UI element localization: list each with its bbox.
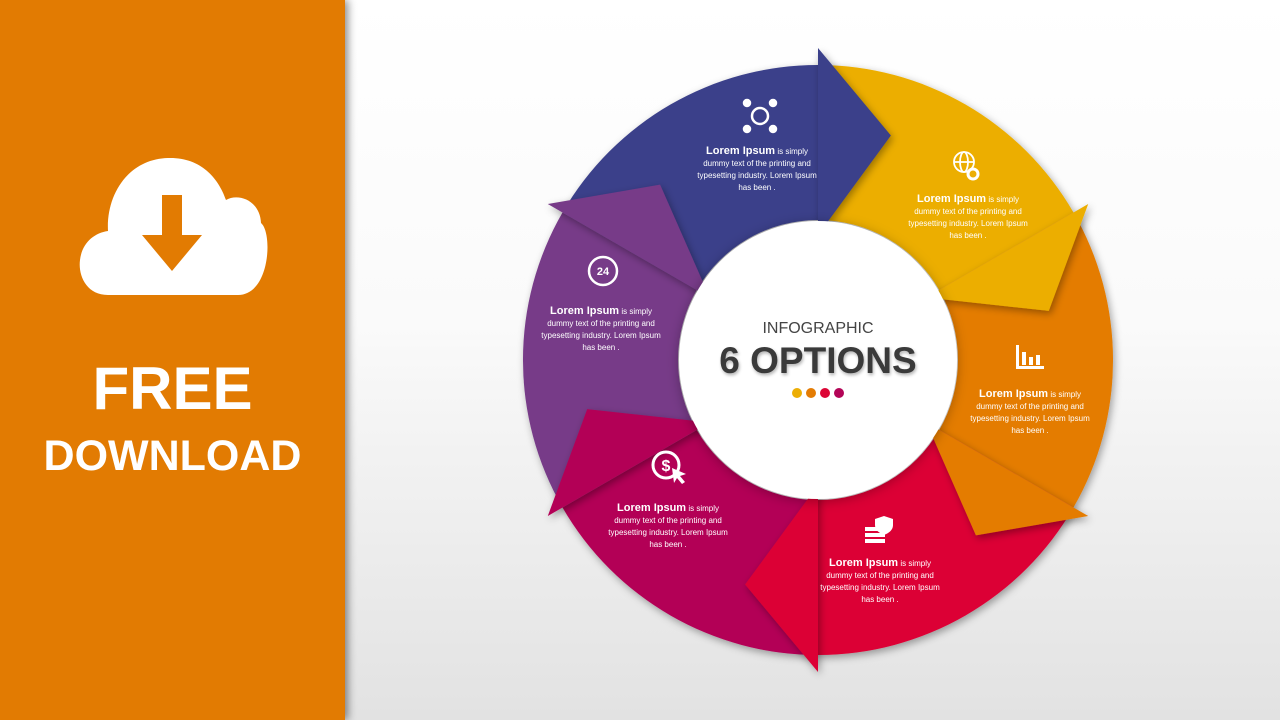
center dots — [792, 388, 844, 398]
icon: cloud download — [80, 158, 268, 295]
icon: globe gear — [954, 152, 978, 179]
icon: dollar click — [653, 452, 686, 484]
heading: DOWNLOAD: DOWNLOAD — [44, 432, 301, 480]
center title: 6 OPTIONS: 6 OPTIONS — [719, 340, 917, 381]
text: magenta option: Lorem Ipsum is simply dummy text of the printing and typesetting industry. Lorem Ipsum has been . — [608, 502, 728, 549]
panel: left orange banner — [0, 0, 345, 720]
text: blue option: Lorem Ipsum is simply dummy text of the printing and typesetting industry. Lorem Ipsum has been . — [697, 145, 817, 192]
text: yellow option: Lorem Ipsum is simply dummy text of the printing and typesetting industry. Lorem Ipsum has been . — [908, 193, 1028, 240]
icon: dollar click: $ — [662, 458, 671, 475]
icon: stack shield — [865, 516, 893, 543]
heading: FREE: FREE — [92, 355, 253, 422]
icon: network person — [744, 100, 776, 132]
icon: 24 phone — [589, 257, 617, 285]
icon: chart — [1016, 345, 1044, 369]
text: purple option: Lorem Ipsum is simply dummy text of the printing and typesetting industry. Lorem Ipsum has been . — [541, 305, 661, 352]
center title: INFOGRAPHIC: INFOGRAPHIC — [762, 320, 874, 337]
text: orange option: Lorem Ipsum is simply dummy text of the printing and typesetting industry. Lorem Ipsum has been . — [970, 388, 1090, 435]
icon: 24 phone: 24 — [597, 266, 610, 278]
text: red option: Lorem Ipsum is simply dummy text of the printing and typesetting industry. Lorem Ipsum has been . — [820, 557, 940, 604]
inner circle — [679, 221, 957, 499]
